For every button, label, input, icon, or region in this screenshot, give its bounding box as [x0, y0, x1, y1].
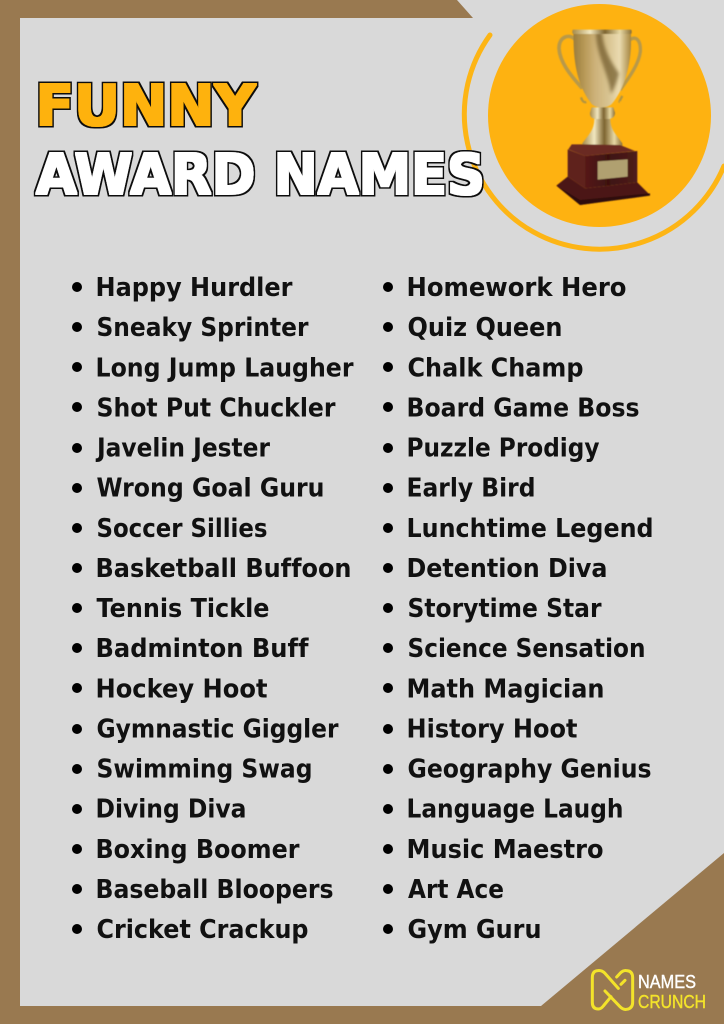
title [36, 74, 485, 208]
item: Detention Diva: Detention Diva [406, 554, 608, 584]
item: Cricket Crackup: Cricket Crackup [96, 915, 308, 945]
list: left column of award names [72, 273, 354, 945]
item: Homework Hero: Homework Hero [406, 273, 626, 303]
item: Music Maestro: Music Maestro [406, 835, 604, 865]
item: Sneaky Sprinter: Sneaky Sprinter [96, 313, 309, 343]
decorative arc around circle [464, 35, 724, 249]
item: Boxing Boomer: Boxing Boomer [96, 835, 300, 865]
logo: Names Crunch [592, 971, 706, 1012]
item: Quiz Queen: Quiz Queen [408, 313, 562, 343]
title line: AWARD NAMES: AWARD NAMES [36, 143, 485, 208]
item: Board Game Boss: Board Game Boss [406, 393, 640, 423]
item: Baseball Bloopers: Baseball Bloopers [96, 875, 334, 905]
frame: brown top and left border [0, 0, 473, 1024]
item: Language Laugh: Language Laugh [406, 795, 624, 825]
item: Basketball Buffoon: Basketball Buffoon [96, 554, 352, 584]
item: Science Sensation: Science Sensation [408, 634, 646, 664]
item: Storytime Star: Storytime Star [408, 594, 602, 624]
title line: FUNNY: FUNNY [36, 74, 257, 139]
item: Math Magician: Math Magician [406, 674, 604, 704]
item: Early Bird: Early Bird [406, 474, 536, 504]
item: Wrong Goal Guru: Wrong Goal Guru [96, 474, 324, 504]
list: right column of award names [383, 273, 654, 945]
logo text: NAMES: NAMES [638, 972, 696, 992]
item: Art Ace: Art Ace [408, 875, 504, 905]
frame: brown bottom border with corner triangle [0, 853, 724, 1024]
item: Long Jump Laugher: Long Jump Laugher [96, 353, 354, 383]
item: Tennis Tickle: Tennis Tickle [96, 594, 270, 624]
item: Lunchtime Legend: Lunchtime Legend [406, 514, 654, 544]
item: History Hoot: History Hoot [406, 714, 578, 744]
item: Badminton Buff: Badminton Buff [96, 634, 309, 664]
item: Gymnastic Giggler: Gymnastic Giggler [96, 714, 339, 744]
item: Diving Diva: Diving Diva [96, 795, 246, 825]
item: Puzzle Prodigy: Puzzle Prodigy [406, 434, 600, 464]
item: Geography Genius: Geography Genius [408, 754, 652, 784]
item: Chalk Champ: Chalk Champ [408, 353, 584, 383]
item: Swimming Swag: Swimming Swag [96, 754, 312, 784]
icon: N logo mark [592, 971, 633, 1009]
item: Gym Guru: Gym Guru [408, 915, 542, 945]
icon: gold trophy [556, 30, 650, 205]
orange circle [488, 4, 711, 227]
item: Happy Hurdler: Happy Hurdler [96, 273, 293, 303]
logo text: CRUNCH: CRUNCH [638, 992, 706, 1012]
item: Shot Put Chuckler: Shot Put Chuckler [96, 393, 336, 423]
item: Javelin Jester: Javelin Jester [95, 434, 270, 464]
item: Soccer Sillies: Soccer Sillies [96, 514, 268, 544]
item: Hockey Hoot: Hockey Hoot [96, 674, 268, 704]
